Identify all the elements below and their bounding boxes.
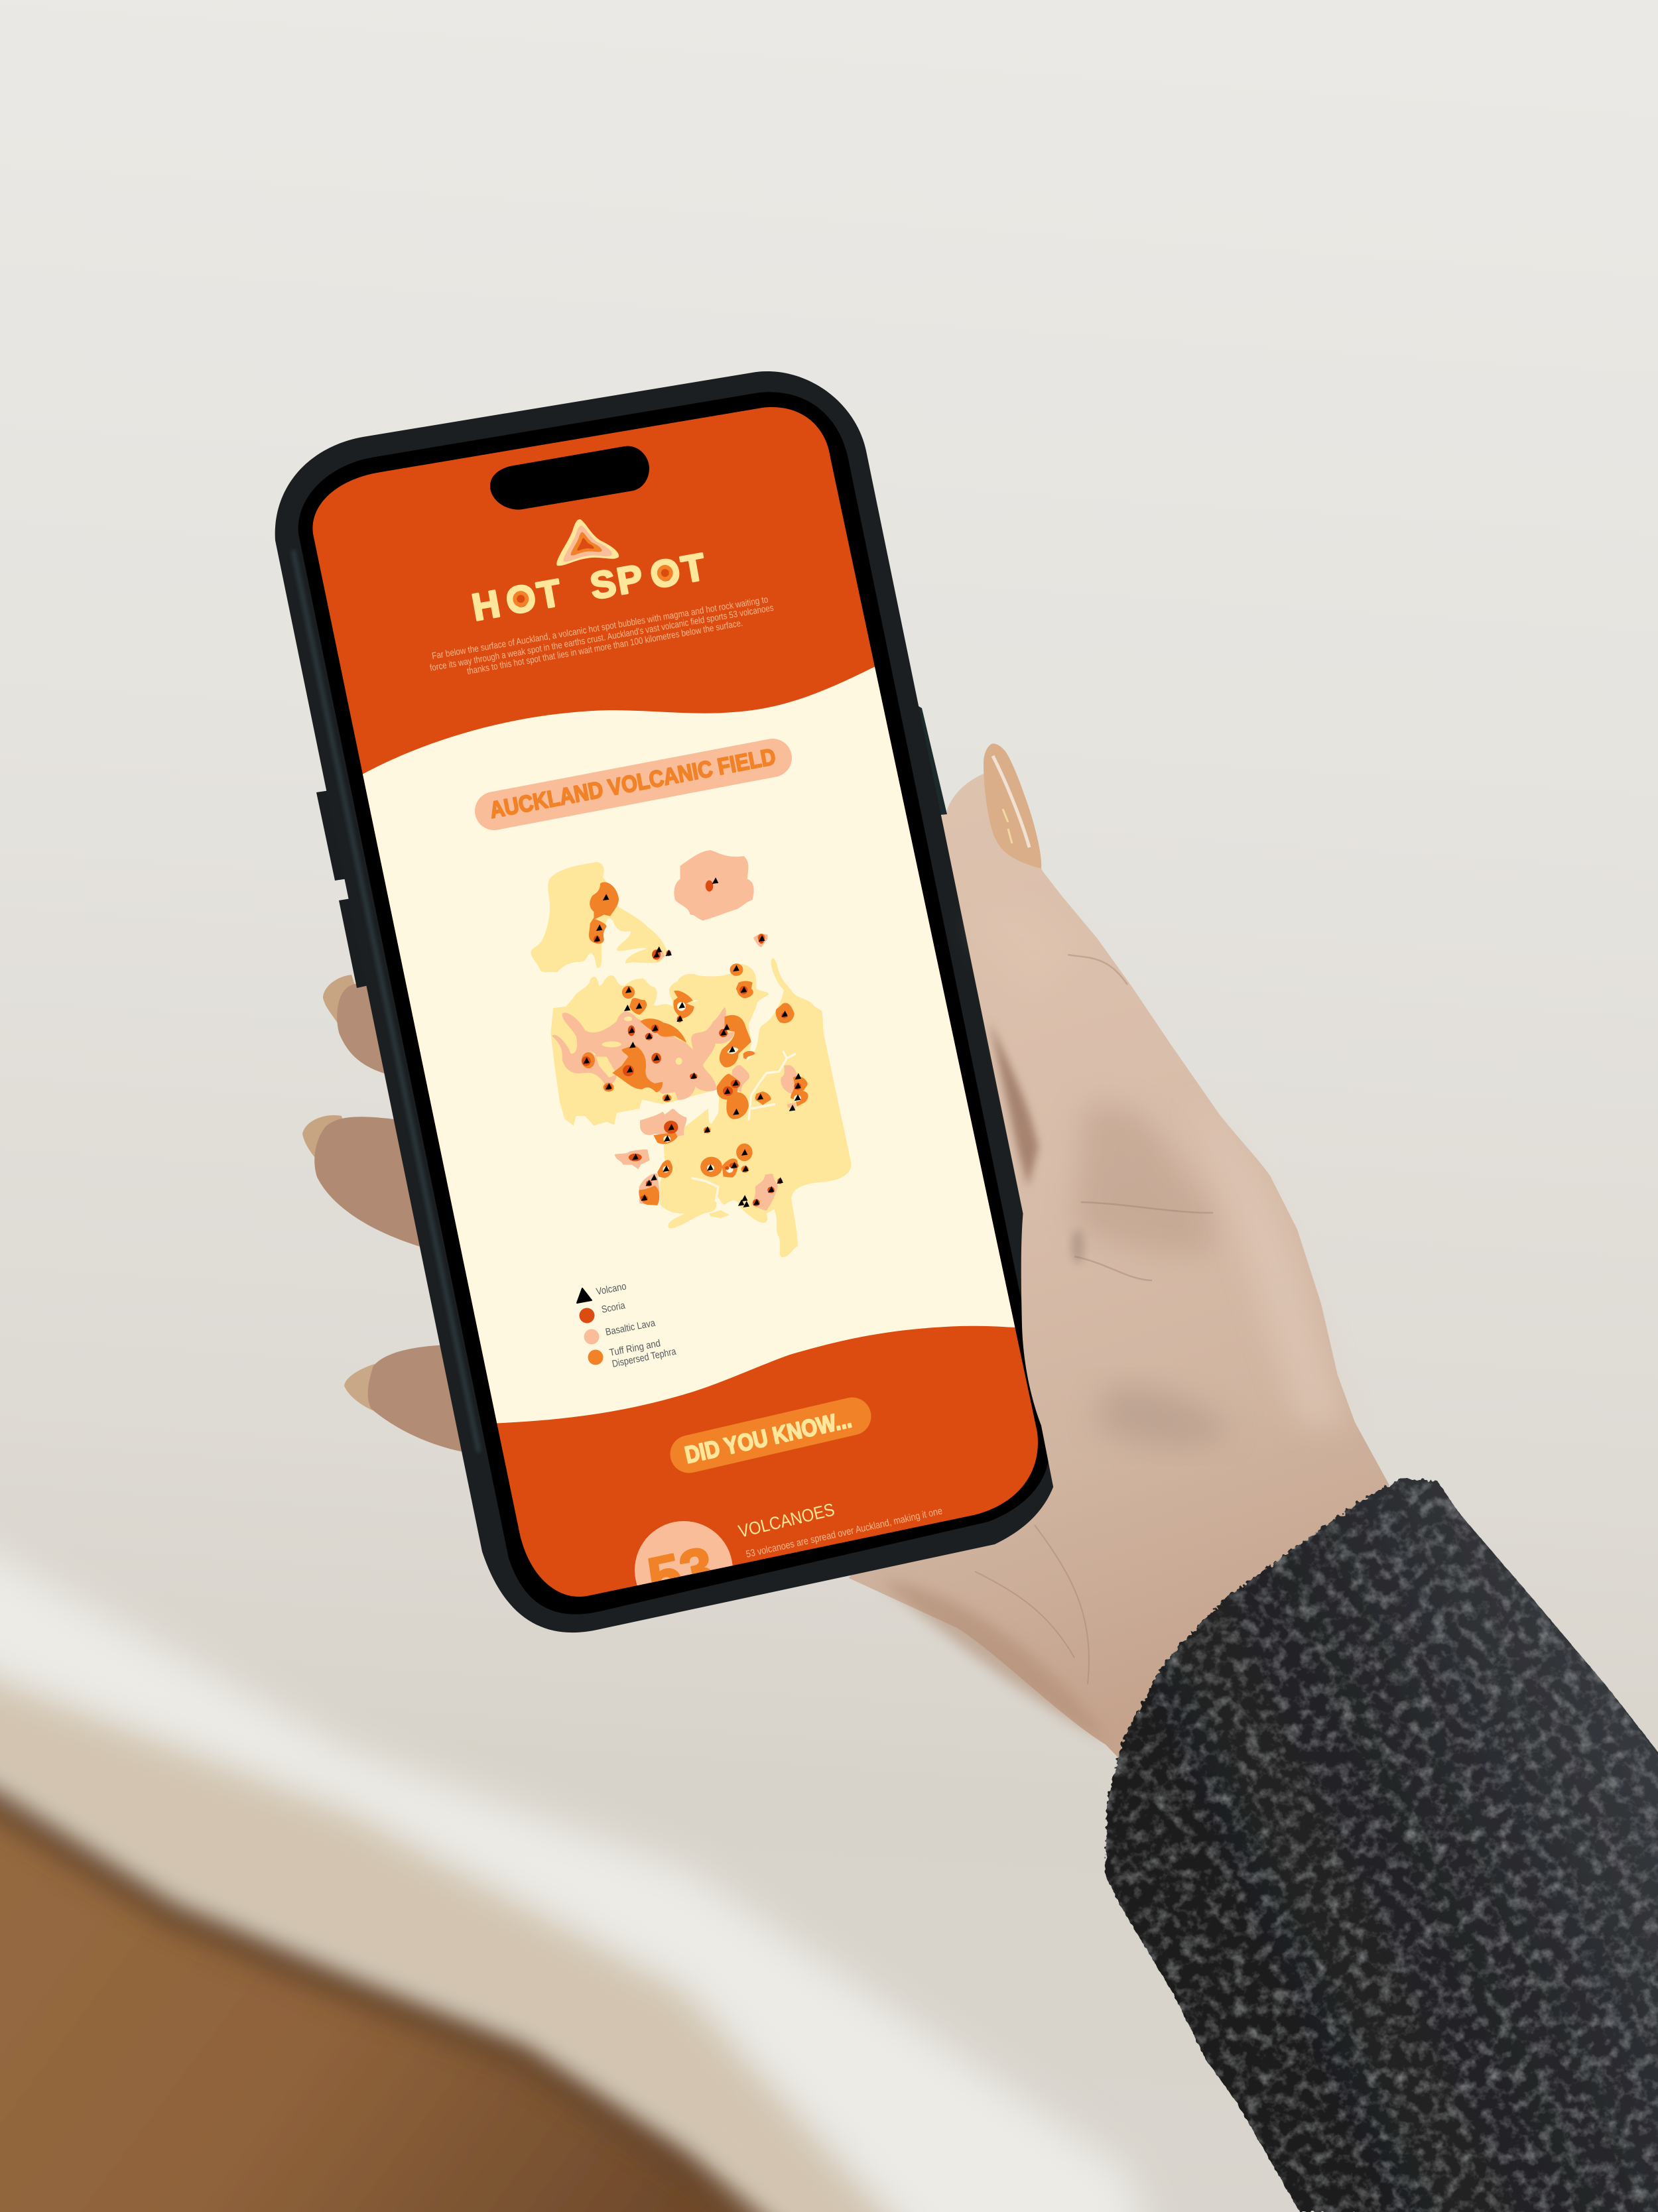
camera island xyxy=(490,446,649,510)
cream map panel with wavy edges xyxy=(362,667,1015,1423)
dark mark in thumb fold xyxy=(1071,1229,1084,1264)
intro text: force its way through a weak spot in the earths crust. Auckland's vast volcanic field sports 53 volcanoes xyxy=(429,602,775,673)
map scoria cones xyxy=(582,881,801,1206)
phone xyxy=(265,371,1094,1632)
light near thumb joint xyxy=(975,902,1081,1001)
heading pill: did you know: DID YOU KNOW... xyxy=(682,1405,854,1469)
map basaltic lava areas xyxy=(552,850,802,1211)
map holes in the lava xyxy=(589,1016,682,1077)
hand and thumb xyxy=(849,774,1389,1767)
left fingers behind the phone xyxy=(302,975,471,1453)
intro text: Far below the surface of Auckland, a volcanic hot spot bubbles with magma and hot rock waiting to xyxy=(431,593,769,661)
title: HOT SPOT xyxy=(469,546,709,629)
icon: hot spot logo xyxy=(556,519,619,566)
panel: screen xyxy=(312,407,1038,1597)
finger 2 xyxy=(302,1115,431,1250)
stat heading: VOLCANOES xyxy=(736,1499,836,1542)
stat description: 53 volcanoes are spread over Auckland, making it one xyxy=(745,1505,944,1560)
heading pill: Auckland Volcanic Field: AUCKLAND VOLCANIC FIELD xyxy=(487,743,778,824)
map cream vents xyxy=(663,1000,801,1173)
map tuff ring and tephra areas xyxy=(582,882,808,1205)
finger 1 xyxy=(323,975,391,1075)
legend xyxy=(577,1280,677,1370)
legend: tuff ring and dispersed tephra xyxy=(588,1337,677,1370)
intro text: thanks to this hot spot that lies in wait more than 100 kilometres below the surface. xyxy=(466,617,743,676)
map water channels xyxy=(692,1051,796,1201)
palm overlapping the phone edge xyxy=(975,902,1346,1684)
palm lower shading xyxy=(882,1581,1108,1741)
legend: tuff ring and dispersed tephra: Tuff Ring and xyxy=(609,1337,661,1359)
blurred sofa in the foreground xyxy=(0,1518,1154,2212)
legend: volcano: Volcano xyxy=(596,1280,627,1298)
map land: tephra-free yellow ground xyxy=(531,862,851,1257)
sleeve xyxy=(1105,1479,1658,2212)
legend: scoria: Scoria xyxy=(601,1300,627,1316)
finger 3 xyxy=(344,1345,471,1453)
map: Auckland volcanic field xyxy=(531,850,851,1257)
thumb-web crevice xyxy=(989,1021,1039,1187)
legend: basaltic lava: Basaltic Lava xyxy=(605,1318,657,1338)
stat: 53 volcanoes xyxy=(635,1504,942,1586)
screen orange base xyxy=(312,407,1038,1597)
phone case xyxy=(275,371,1062,1632)
legend: basaltic lava xyxy=(584,1318,657,1345)
creases xyxy=(975,955,1213,1684)
lower palm shadow xyxy=(1094,1385,1234,1447)
side buttons xyxy=(316,704,947,988)
icon: thumb nail xyxy=(984,743,1041,869)
map volcano markers xyxy=(583,877,801,1207)
legend: tuff ring and dispersed tephra: Dispersed Tephra xyxy=(611,1346,677,1370)
case highlight xyxy=(293,550,479,1452)
shadow wedge below thumb xyxy=(1074,1104,1213,1255)
legend: scoria xyxy=(580,1300,627,1323)
stat number: 53 xyxy=(642,1534,720,1612)
black bezel xyxy=(298,392,1050,1615)
rim light on hand edge xyxy=(1194,1101,1346,1426)
stat circle xyxy=(635,1521,733,1586)
legend: volcano xyxy=(577,1280,627,1303)
